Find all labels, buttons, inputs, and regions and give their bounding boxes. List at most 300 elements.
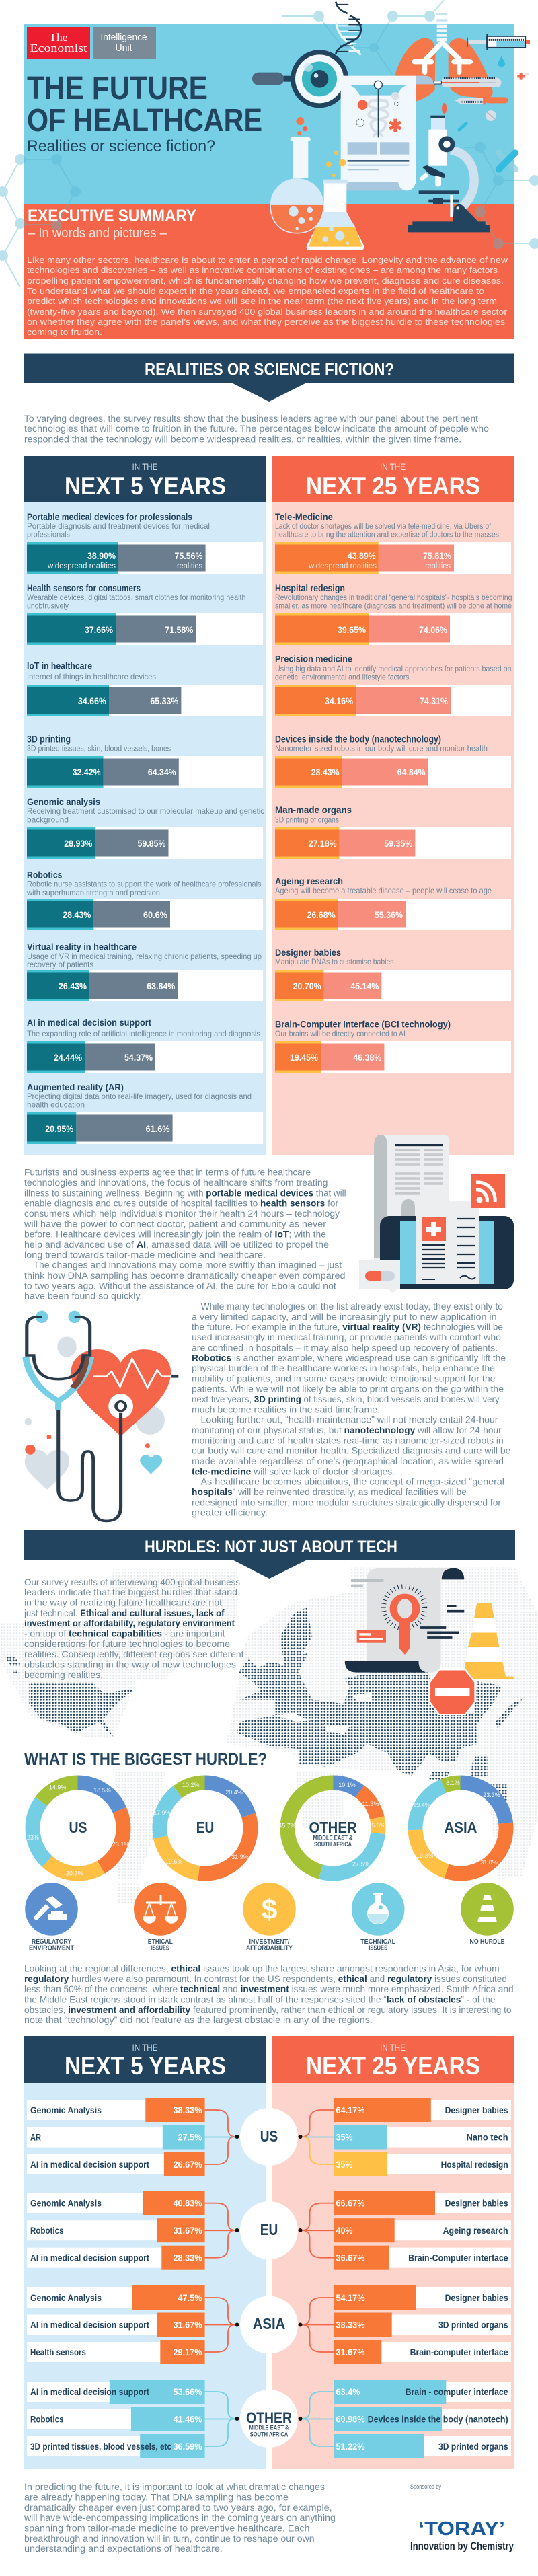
bar: tele-medicine: realities	[425, 562, 451, 570]
text block: conclusion: dramatically cheaper even just compared to two years ago, for example,	[24, 2502, 332, 2513]
text block: wellness paragraph: illness to sustaining wellness. Beginning with portable medical devices that will	[24, 1188, 346, 1198]
panel: next 25 years by region	[272, 2036, 514, 2469]
bar: virtual reality: 63.84%	[147, 981, 176, 991]
text block: hurdles intro: leaders indicate that the biggest hurdles that stand	[24, 1587, 237, 1597]
icon: round flask	[270, 117, 324, 233]
rows: US next 25 years: Nano tech	[467, 2132, 508, 2143]
icon: gavel	[34, 1896, 67, 1920]
sponsor: Toray logo: ‘TORAY’	[418, 2518, 505, 2540]
bar: man-made organs: Man-made organs	[275, 804, 352, 815]
text block: applications paragraphs: much become realities in the said timeframe.	[192, 1404, 380, 1414]
bar: augmented reality: Projecting digital data onto real-life imagery, used for diagnosis and	[27, 1092, 252, 1101]
region connector: Other: OTHER	[246, 2409, 292, 2427]
region connector: US: US	[260, 2127, 278, 2145]
bar: IoT in healthcare: 65.33%	[150, 695, 179, 706]
donut chart: US: 18.5%	[93, 1787, 111, 1794]
donut chart: Other: SOUTH AFRICA	[314, 1841, 352, 1848]
bar: 3D printing: 3D printing	[27, 733, 71, 744]
text block: executive summary: technologies and discoveries – as well as innovative combinations of existing ones – are among the many factors	[27, 266, 498, 275]
donut chart: Other: OTHER	[309, 1819, 357, 1836]
bar: brain-computer interface: Brain-Computer Interface (BCI technology)	[275, 1018, 451, 1029]
text block: regional differences: the Middle East regions stood in stark contrast as almost half of the responses sited the “ lack of obstacles” - of the	[24, 1995, 495, 2004]
text block: regional differences: less than 50% of the concerns, where technical and investment issues were much more emphasized. South Africa and	[24, 1984, 514, 1994]
bar: AI in medical decision support: AI in medical decision support	[27, 1017, 151, 1028]
rows: Asia next 5 years: AI in medical decision support	[30, 2319, 149, 2330]
icon: callout with pill	[359, 1260, 400, 1293]
text block: hurdles intro: investment or affordability, regulatory environment	[24, 1618, 235, 1628]
donut chart: Asia	[413, 1780, 506, 1874]
donut chart: Other: 27.5%	[352, 1861, 369, 1868]
rows: US next 25 years: 35%	[336, 2159, 353, 2170]
text block: applications paragraphs	[192, 1301, 511, 1518]
heading: next 5 years: IN THE	[132, 461, 157, 472]
rows: Asia next 25 years	[334, 2285, 511, 2364]
heading: next 25 years: NEXT 25 YEARS	[306, 472, 480, 500]
bar: tele-medicine: 75.81%	[423, 550, 451, 561]
text block: wellness paragraph: will have the power to connect doctor, patient and community as never	[24, 1219, 327, 1229]
icon: document with caduceus	[341, 76, 434, 190]
rows: EU next 5 years: AI in medical decision support	[30, 2252, 149, 2263]
bar: hospital redesign: Revolutionary changes in traditional “general hospitals”- hospitals becoming	[275, 593, 512, 602]
logo: The Economist Intelligence Unit: Unit	[116, 42, 132, 54]
donut chart: US: US	[69, 1819, 87, 1836]
rows: Other next 5 years: 3D printed tissues, blood vessels, etc	[30, 2441, 171, 2452]
bar: genomic analysis: 28.93%	[64, 838, 93, 849]
text block: applications paragraphs: the future. For example in the future, virtual reality (VR) technologies will be	[192, 1322, 503, 1332]
title: Realities or science fiction?	[27, 137, 215, 155]
bar: augmented reality	[27, 1082, 263, 1144]
rows: EU next 25 years: Designer babies	[445, 2198, 508, 2209]
bar: tele-medicine: widespread realities	[308, 562, 377, 570]
text block: hurdles intro: becoming realities.	[24, 1669, 103, 1680]
legend: no hurdle: NO HURDLE	[469, 1938, 504, 1946]
text block: regional differences: obstacles, investment and affordability featured prominently, rather than ethical or regulatory issues. It is interesting to	[24, 2005, 511, 2015]
heading: next 5 years: NEXT 5 YEARS	[65, 472, 226, 500]
banner: realities or science fiction	[24, 354, 514, 402]
bar: health sensors	[27, 582, 263, 645]
legend: ethical issues: ETHICAL	[148, 1938, 173, 1946]
rows: Other next 25 years: Brain - computer interface	[406, 2386, 508, 2397]
bar: brain-computer interface: Our brains will be directly connected to AI	[275, 1029, 406, 1038]
bar: robotics	[26, 869, 263, 930]
bar: augmented reality: 61.6%	[146, 1123, 170, 1134]
panel: next 25 years	[272, 456, 514, 1155]
map: highlighted US	[3, 1655, 134, 1737]
text block: executive summary: coming to fruition.	[27, 328, 102, 337]
text block: conclusion: are already happening today. That DNA sampling has become	[24, 2491, 289, 2502]
bar: ageing research: Ageing research	[275, 876, 343, 886]
legend: no hurdle	[461, 1883, 514, 1946]
text block: wellness paragraph: to two years ago. Without the assistance of AI, the cure for Ebola could not	[24, 1281, 336, 1291]
rows: Other next 25 years: 63.4%	[336, 2386, 360, 2397]
rows: Other next 5 years: AI in medical decision support	[30, 2386, 149, 2397]
bar: robotics: Robotics	[27, 869, 63, 880]
text block: applications paragraphs: Looking further out, “health maintenance” will not merely entail 24-hour	[200, 1415, 498, 1425]
heading: next 5 years	[24, 456, 266, 502]
text block: executive summary	[27, 256, 508, 337]
bar: health sensors: unobtrusively	[27, 601, 69, 611]
rows: Asia next 5 years: 47.5%	[178, 2292, 202, 2303]
text block: executive summary: Like many other sectors, healthcare is about to enter a period of rapid change. Longevity and the advance of new	[27, 256, 508, 265]
bar: genomic analysis: 59.85%	[137, 838, 166, 849]
bar: hospital redesign: smaller, as more healthcare (diagnosis and treatment) will be done at home	[275, 601, 512, 611]
text block: wellness paragraph: consumers which help individuals monitor their health 24 hours – technology	[24, 1209, 340, 1219]
icon: key	[393, 1596, 416, 1655]
header panel: blue hero background	[24, 24, 514, 204]
text block: executive summary: (twenty-five years and beyond). We then surveyed 400 global business leaders in and around the healthcare sector	[27, 307, 507, 317]
bar: health sensors: 37.66%	[85, 624, 113, 635]
heading: next 25 years: IN THE	[380, 461, 406, 472]
text block: executive summary: predict which technologies and innovations we will see in the near term (the next five years) and in the long term	[27, 297, 497, 306]
donut chart: EU: 31.9%	[231, 1854, 249, 1860]
bar: designer babies: 20.70%	[293, 981, 321, 991]
region connector: Other: MIDDLE EAST &	[249, 2425, 289, 2432]
donut chart: EU: 20.4%	[225, 1789, 243, 1796]
donut chart: Asia: 23.3%	[483, 1792, 500, 1798]
text block: applications paragraphs: a very limited capacity, and will be increasingly put to new application in	[192, 1312, 497, 1322]
region connector: Other: SOUTH AFRICA	[250, 2431, 288, 2439]
text block: applications paragraphs: tele-medicine will solve lack of doctor shortages.	[192, 1466, 395, 1476]
bar: hospital redesign	[275, 582, 512, 645]
rows: Asia next 25 years: 31.67%	[336, 2347, 365, 2357]
bar: 3D printing: 64.34%	[148, 767, 176, 778]
donut chart: Other: 10.1%	[338, 1782, 356, 1788]
bar: designer babies	[275, 947, 511, 1001]
bar: precision medicine: 74.31%	[420, 695, 448, 706]
rows: Asia next 5 years: 29.17%	[174, 2347, 202, 2357]
donut chart: EU	[153, 1782, 250, 1874]
rows: Asia next 25 years: 54.17%	[336, 2292, 365, 2303]
text block: applications paragraphs: are confined in hospitals – it may also help speed up recovery of patients.	[192, 1342, 498, 1353]
bar: virtual reality: Usage of VR in medical training, relaxing chronic patients, speeding up	[27, 952, 262, 961]
region connector: EU: EU	[260, 2221, 278, 2238]
bar: AI in medical decision support	[27, 1017, 263, 1073]
bar: portable medical devices: professionals	[27, 530, 70, 539]
rows: US next 5 years: 26.67%	[174, 2159, 202, 2170]
rows: EU next 25 years	[334, 2191, 511, 2270]
bar: man-made organs: 27.18%	[309, 838, 337, 849]
text block: hurdles intro: obstacles standing in the way of new technologies	[24, 1659, 236, 1669]
text block: executive summary: on whether they agree with the panel’s views, and what they perceive as the biggest hurdle to these technologies	[27, 317, 505, 327]
decorative molecule network	[0, 0, 538, 287]
bar: hospital redesign: Hospital redesign	[275, 582, 345, 593]
bar: IoT in healthcare: 34.66%	[78, 695, 106, 706]
text block: applications paragraphs: As healthcare becomes ubiquitous, the concept of mega-sized “general	[200, 1477, 504, 1487]
heading: next 5 years: IN THE	[132, 2042, 157, 2053]
heading: executive summary: EXECUTIVE SUMMARY	[28, 206, 196, 225]
bar: ageing research	[275, 876, 511, 930]
text block: wellness paragraph: help and advanced use of AI, amassed data will be utilized to propel the	[24, 1240, 329, 1250]
rows: Other next 25 years	[334, 2380, 511, 2458]
text block: executive summary: To understand what we should expect in the years ahead, we empaneled experts in the field of healthcare to	[27, 287, 484, 296]
text block: applications paragraphs: used increasingly in medical training, or provide patients with comfort who	[192, 1332, 501, 1342]
header panel: orange executive summary background	[24, 204, 514, 339]
heading: next 25 years: NEXT 25 YEARS	[306, 2052, 480, 2080]
legend: ethical issues	[134, 1883, 187, 1952]
text block: applications paragraphs: monitoring and cure of health states real-time as nanometer-sized robots in	[192, 1435, 504, 1445]
bar: virtual reality: Virtual reality in healthcare	[27, 942, 137, 952]
text block: hurdles intro: in the way of realizing future healthcare are not	[24, 1597, 222, 1607]
rows: Other next 25 years: 3D printed organs	[438, 2441, 508, 2452]
text block: survey intro: To varying degrees, the survey results show that the business leaders agree with our panel about the pertinent	[24, 414, 478, 424]
bar: precision medicine: Precision medicine	[275, 654, 352, 665]
legend: investment/affordability	[243, 1883, 296, 1952]
icon: newspaper and phone illustration	[359, 1135, 514, 1293]
text block: survey intro	[24, 414, 489, 444]
bar: 3D printing: 3D printed tissues, skin, blood vessels, bones	[27, 744, 171, 753]
banner: hurdles	[24, 1530, 515, 1579]
bar: health sensors: Wearable devices, digital tattoos, smart clothes for monitoring health	[27, 593, 246, 602]
legend: regulatory environment	[25, 1883, 78, 1952]
bar: devices inside the body	[275, 733, 511, 788]
icon: RSS square	[471, 1174, 505, 1208]
bar: robotics: 28.43%	[63, 909, 91, 920]
icon: stethoscope and heart	[25, 1311, 178, 1521]
world map: dotted background	[0, 1567, 538, 1903]
rows: EU next 25 years: 66.67%	[336, 2198, 365, 2209]
donut chart: Asia: ASIA	[444, 1819, 477, 1836]
text block: executive summary: propelling patient empowerment, which is fundamentally changing how we prevent, diagnose and cure diseases.	[27, 276, 504, 286]
text block: applications paragraphs: Robotics is another example, where widespread use can significantly lift the	[192, 1353, 506, 1363]
bar: 3D printing: 32.42%	[73, 767, 101, 778]
rows: Asia next 25 years: 3D printed organs	[438, 2319, 508, 2330]
rows: Asia next 5 years	[27, 2285, 205, 2364]
donut chart: Other: 45.7%	[278, 1823, 296, 1829]
text block: hurdles intro: realities. Consequently, different regions see different	[24, 1649, 244, 1659]
rows: EU next 5 years: 40.83%	[174, 2198, 202, 2209]
rows: Other next 25 years: 60.98%	[336, 2413, 365, 2424]
bar: precision medicine: 34.16%	[325, 695, 353, 706]
logo: The Economist Intelligence Unit: Intelligence	[101, 32, 147, 43]
icon: blue heart	[140, 1455, 162, 1474]
rows: US next 5 years: 27.5%	[178, 2132, 202, 2143]
bar: virtual reality	[27, 942, 263, 1001]
rows: US next 5 years: AR	[30, 2132, 41, 2143]
bar: genomic analysis: Receiving treatment customised to our molecular makeup and genetic	[27, 806, 264, 816]
text block: hurdles intro: just technical. Ethical and cultural issues, lack of	[24, 1607, 225, 1618]
donut chart: Asia: 19.4%	[413, 1802, 430, 1809]
bar: genomic analysis	[27, 796, 264, 859]
bar: tele-medicine: Tele-Medicine	[275, 511, 333, 522]
title: THE FUTURE	[27, 71, 208, 106]
text block: applications paragraphs: hospitals” will be reinvented drastically, as medical facilities will be	[192, 1487, 467, 1497]
text block: conclusion: understanding and expectations of healthcare.	[24, 2543, 223, 2554]
legend: technical issues: ISSUES	[369, 1944, 387, 1952]
bar: tele-medicine	[275, 511, 511, 574]
donut chart: Asia: 6.1%	[446, 1780, 460, 1786]
text block: regional differences	[24, 1964, 514, 2025]
bar: augmented reality: health education	[27, 1100, 85, 1110]
donut chart: US	[27, 1782, 129, 1877]
bar: man-made organs: 59.35%	[384, 838, 413, 849]
bar: brain-computer interface: 19.45%	[290, 1052, 318, 1063]
bar: AI in medical decision support: 24.44%	[54, 1052, 82, 1063]
bar: man-made organs: 3D printing of organs	[275, 815, 339, 825]
rows: US next 5 years: AI in medical decision support	[30, 2159, 149, 2170]
bar: tele-medicine: 43.89%	[348, 550, 376, 561]
bar: tele-medicine: Lack of doctor shortages will be solved via tele-medicine, via Ubers of	[275, 521, 492, 531]
heading: next 25 years: IN THE	[380, 2042, 406, 2053]
rows: EU next 5 years: 28.33%	[174, 2252, 202, 2263]
donut chart: EU: 10.2%	[182, 1782, 199, 1788]
logo: The Economist Intelligence Unit: Economist	[30, 42, 87, 54]
bar: AI in medical decision support: The expanding role of artificial intelligence in monitoring and diagnosis	[27, 1029, 260, 1038]
icon: syringe	[467, 34, 538, 50]
icon: flask	[367, 1893, 389, 1924]
banner: realities or science fiction: REALITIES OR SCIENCE FICTION?	[145, 361, 394, 379]
text block: survey intro: technologies that will come to fruition in the future. The percentages below indicate the amount of people who	[24, 424, 489, 434]
region connector: Asia: ASIA	[253, 2315, 285, 2333]
icon: conical flask	[307, 151, 363, 250]
text block: wellness paragraph: technologies and innovations, the focus of healthcare shifts from treating	[24, 1178, 328, 1188]
bar: designer babies: Designer babies	[275, 947, 341, 958]
icon: heart	[71, 1349, 171, 1437]
rows: Asia next 25 years: Brain-computer interface	[410, 2347, 508, 2357]
text block: conclusion	[24, 2481, 336, 2554]
icon: dollar sign: $	[262, 1893, 277, 1925]
text block: regional differences: Looking at the regional differences, ethical issues took up the largest share amongst respondents in Asia, for whom	[24, 1964, 500, 1973]
bar: portable medical devices: widespread realities	[47, 562, 116, 570]
legend: regulatory environment: REGULATORY	[32, 1938, 71, 1946]
title: OF HEALTHCARE	[27, 103, 262, 139]
legend: technical issues: TECHNICAL	[360, 1938, 396, 1946]
icon: thermometer	[434, 78, 501, 87]
bar: ageing research: 55.36%	[375, 909, 403, 920]
region connector: Other	[205, 2390, 334, 2448]
logo: The Economist Intelligence Unit: The	[50, 31, 67, 44]
text block: wellness paragraph: enable diagnosis and cures outside of hospital facilities to health sensors for	[24, 1199, 338, 1209]
heading: next 25 years	[272, 2036, 514, 2083]
rows: Asia next 5 years: 31.67%	[174, 2319, 202, 2330]
text block: hurdles intro: - on top of technical capabilities - are important	[24, 1628, 225, 1638]
bar: portable medical devices: Portable diagnosis and treatment devices for medical	[27, 521, 210, 531]
text block: applications paragraphs: next five years, 3D printing of tissues, skin, blood vessels and bones will very	[192, 1394, 500, 1404]
bar: health sensors: Health sensors for consumers	[27, 582, 141, 593]
logo: The Economist Intelligence Unit	[27, 27, 156, 59]
bar: robotics: 60.6%	[143, 909, 167, 920]
text block: regional differences: note that “technology” did not feature as the largest obstacle in any of the regions.	[24, 2015, 373, 2025]
text block: applications paragraphs: physical burden of the healthcare workers in hospitals, help enhance the	[192, 1363, 495, 1373]
donut chart: EU: 19.6%	[165, 1858, 182, 1865]
bar: genomic analysis: background	[27, 815, 69, 825]
panel: next 5 years by region	[24, 2036, 266, 2469]
heading: executive summary: – In words and pictures –	[28, 226, 167, 241]
sponsor: Toray logo	[410, 2483, 514, 2552]
text block: conclusion: breakthrough and innovation will in turn, continue to reshape our own	[24, 2533, 315, 2544]
heading: next 5 years: NEXT 5 YEARS	[65, 2052, 226, 2080]
icon: cone	[477, 1895, 497, 1922]
bar: portable medical devices: Portable medical devices for professionals	[27, 511, 192, 522]
rows: Asia next 5 years: Health sensors	[30, 2347, 86, 2357]
rows: EU next 5 years: Genomic Analysis	[30, 2198, 102, 2209]
text block: hurdles intro: considerations for future technologies to become	[24, 1638, 230, 1649]
legend: ethical issues: ISSUES	[151, 1944, 169, 1952]
bar: designer babies: 45.14%	[350, 981, 379, 991]
rows: Other next 5 years: 36.59%	[174, 2441, 202, 2452]
rows: EU next 5 years: Robotics	[30, 2225, 64, 2236]
donut chart: US: 14.9%	[49, 1784, 66, 1791]
icon: drop, pills and plaster	[442, 56, 530, 169]
text block: applications paragraphs: made available regardless of one’s geographical location, as wide-spread	[192, 1456, 504, 1466]
bar: designer babies: Manipulate DNAs to customise babies	[275, 957, 394, 967]
rows: US next 5 years: 38.33%	[174, 2105, 202, 2115]
icon: magnifying glass with eye	[252, 50, 348, 108]
rows: US next 25 years: 35%	[336, 2132, 353, 2143]
bar: portable medical devices	[27, 511, 263, 574]
bar: precision medicine	[275, 654, 511, 716]
text block: applications paragraphs: mobility of patients, and in some cases provide emotional support for the	[192, 1373, 495, 1384]
bar: virtual reality: recovery of patients	[27, 960, 93, 969]
legend: technical issues	[352, 1883, 405, 1952]
rows: EU next 5 years: 31.67%	[174, 2225, 202, 2236]
icon: traffic cone	[463, 1603, 514, 1679]
donut chart: Other: MIDDLE EAST &	[313, 1835, 353, 1842]
text block: wellness paragraph	[24, 1168, 346, 1301]
text block: conclusion: In predicting the future, it is important to look at what dramatic changes	[24, 2481, 325, 2492]
title	[27, 71, 262, 155]
text block: hurdles intro: Our survey results of interviewing 400 global business	[24, 1577, 240, 1587]
bar: hospital redesign: 74.06%	[419, 624, 447, 635]
bar: augmented reality: 20.95%	[45, 1123, 74, 1134]
region connector: Asia	[205, 2296, 334, 2354]
donut chart: Asia: 31.8%	[480, 1859, 498, 1866]
bar: tele-medicine: healthcare to bring the attention and expertise of doctors to the masses	[275, 530, 499, 539]
donut chart: EU: EU	[196, 1819, 214, 1836]
heading: next 25 years	[272, 456, 514, 502]
sponsor: Toray logo: Sponsored by	[410, 2483, 441, 2490]
heading: executive summary	[28, 206, 196, 241]
text block: applications paragraphs: greater efficiency.	[192, 1508, 268, 1518]
icon: scroll with key, cone and stop sign	[345, 1568, 514, 1714]
bar: portable medical devices: 38.90%	[87, 550, 116, 561]
donut chart: Asia: 19.3%	[416, 1852, 433, 1859]
rows: Other next 5 years: 53.66%	[174, 2386, 202, 2397]
rows: EU next 25 years: 40%	[336, 2225, 353, 2236]
hero illustration: medical items	[252, 2, 538, 250]
bar: robotics: Robotic nurse assistants to support the work of healthcare professionals	[27, 880, 261, 889]
rows: US next 25 years	[334, 2098, 511, 2176]
rows: EU next 25 years: 36.67%	[336, 2252, 365, 2263]
icon: DNA helix	[336, 2, 362, 55]
bar: virtual reality: 26.43%	[59, 981, 87, 991]
donut chart: US: 23.1%	[112, 1841, 129, 1848]
text block: wellness paragraph: The changes and innovations may come more swiftly than imagined – just	[34, 1260, 342, 1271]
rows: EU next 25 years: Ageing research	[443, 2225, 508, 2236]
panel: next 5 years	[24, 456, 266, 1155]
text block: wellness paragraph: long trend towards tailor-made medicine and healthcare.	[24, 1250, 266, 1260]
bar: IoT in healthcare	[27, 660, 263, 716]
bar: portable medical devices: 75.56%	[175, 550, 203, 561]
icon: microscope	[408, 116, 490, 232]
text block: wellness paragraph: Futurists and business experts agree that in terms of future healthcare	[24, 1168, 311, 1178]
legend: regulatory environment: ENVIRONMENT	[29, 1944, 74, 1952]
bar: 3D printing	[27, 733, 263, 788]
icon: scales	[143, 1895, 178, 1923]
bar: precision medicine: genetic, environmental and lifestyle factors	[275, 673, 409, 682]
bar: devices inside the body: 28.43%	[311, 767, 340, 778]
bar: brain-computer interface: 46.38%	[353, 1052, 382, 1063]
bar: ageing research: Ageing will become a treatable disease – people will cease to age	[275, 886, 492, 895]
icon: medical cross card	[422, 1217, 446, 1241]
rows: Other next 25 years: 51.22%	[336, 2441, 365, 2452]
text block: applications paragraphs: While many technologies on the list already exist today, they exist only to	[200, 1301, 503, 1312]
bar: hospital redesign: 39.65%	[338, 624, 366, 635]
donut chart: EU: 17.9%	[153, 1809, 171, 1816]
donut chart: Other	[278, 1782, 385, 1874]
icon: small syringe	[455, 97, 508, 104]
text block: applications paragraphs: our body will cure and monitor health. Specialized diagnosis and cure will be	[192, 1446, 511, 1456]
donut chart: US: 23%	[27, 1834, 39, 1841]
